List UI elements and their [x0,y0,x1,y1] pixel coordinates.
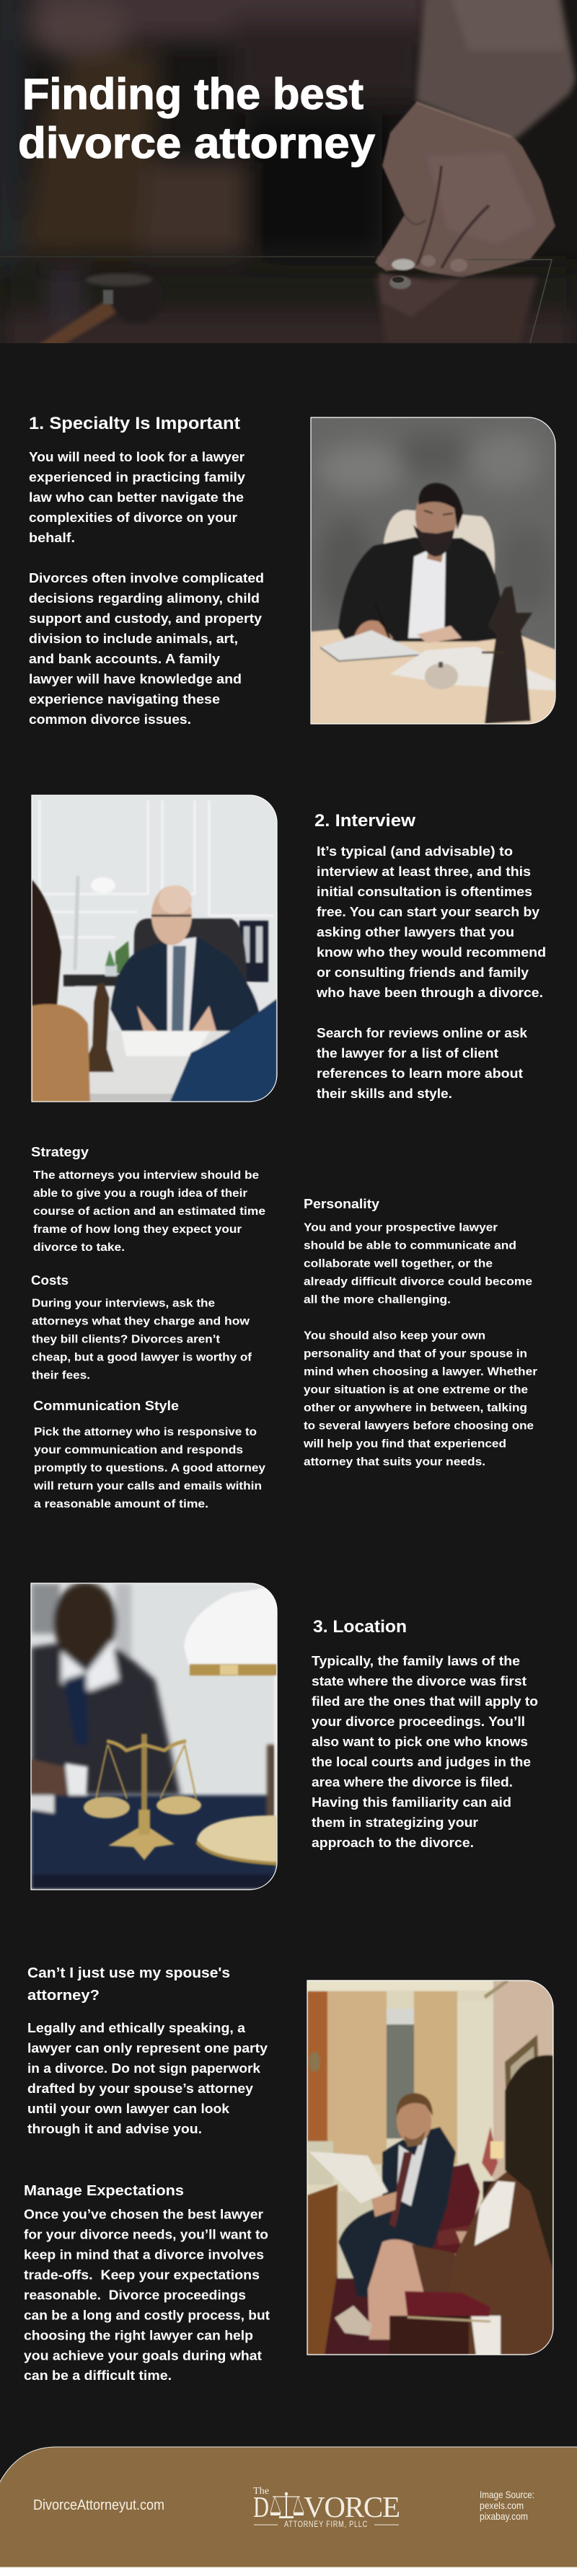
text block: interview: interview at least three, and this [317,864,531,879]
subsection: costs: Costs [31,1273,69,1288]
text block: location: them in strategizing your [312,1815,478,1830]
text block: interview: the lawyer for a list of client [317,1046,498,1061]
text block: specialty: behalf. [29,531,75,545]
sleeve [416,0,576,141]
text block: specialty: and bank accounts. A family [29,652,220,666]
subsection: manage expectations: trade-offs. Keep your expectations [24,2268,260,2283]
subsection: spouse's attorney: through it and advise you. [27,2122,202,2136]
hand [375,102,555,278]
subsection: spouse's attorney: drafted by your spouse’s attorney [27,2081,253,2096]
text block: location: Having this familiarity can aid [312,1795,511,1810]
subsection: costs [31,1273,252,1381]
subsection: strategy: The attorneys you interview should be [33,1169,259,1182]
text block: location: the local courts and judges in the [312,1755,531,1769]
text block: specialty: support and custody, and property [29,611,262,626]
photo: lawyer writing at desk [311,417,555,728]
subsection: communication style: promptly to questions. A good attorney [34,1462,265,1474]
text block: specialty: decisions regarding alimony, child [29,591,260,606]
text block: location: state where the divorce was first [312,1674,527,1688]
subsection: spouse's attorney [27,1965,268,2136]
text block: location: also want to pick one who knows [312,1735,528,1749]
subsection: personality: other or anywhere in between, talking [304,1402,527,1415]
text block: location: approach to the divorce. [312,1836,474,1850]
subsection: personality: attorney that suits your needs. [304,1456,485,1468]
subsection: manage expectations: for your divorce needs, you’ll want to [24,2228,268,2242]
subsection: costs: their fees. [32,1370,90,1381]
subsection: personality: all the more challenging. [304,1293,451,1306]
subsection: personality: mind when choosing a lawyer. Whether [304,1366,537,1378]
subsection: costs: During your interviews, ask the [32,1298,215,1309]
subsection: communication style: your communication and responds [34,1444,243,1456]
logo: The Divorce Attorney Firm, PLLC [253,2486,400,2529]
subsection: personality: your situation is at one extreme or the [304,1384,528,1396]
subsection: spouse's attorney: Can’t I just use my spouse's [27,1965,230,1981]
subsection: spouse's attorney: Legally and ethically speaking, a [27,2021,246,2035]
heading: 3. Location: 3. Location [313,1617,407,1637]
image source credits: pixabay.com [480,2510,528,2522]
table and reflections [0,257,552,346]
footer website: DivorceAttorneyut.com [33,2497,164,2513]
text block: interview: It’s typical (and advisable) to [317,844,513,859]
subsection: communication style: Pick the attorney who is responsive to [34,1426,257,1438]
text block: specialty: Divorces often involve complicated [29,571,264,585]
subsection: spouse's attorney: lawyer can only represent one party [27,2041,268,2055]
subsection: personality [303,1197,537,1468]
subsection: manage expectations: choosing the right lawyer can help [24,2329,253,2343]
text block: location [312,1654,538,1850]
subsection: strategy: Strategy [31,1145,89,1159]
text block: specialty [29,450,264,727]
photo: scales of justice on desk [31,1582,277,1890]
subsection: personality: will help you find that experienced [303,1438,506,1451]
subsection: personality: to several lawyers before choosing one [304,1420,534,1432]
subsection: strategy [31,1145,265,1254]
text block: specialty: common divorce issues. [29,712,191,727]
subsection: manage expectations: can be a difficult time. [24,2368,172,2383]
photo: attorney with client in wood office [307,1980,553,2355]
subsection: strategy: divorce to take. [33,1241,125,1254]
text block: specialty: experienced in practicing family [29,470,245,484]
text block: interview: initial consultation is oftentimes [317,885,532,899]
subsection: spouse's attorney: in a divorce. Do not sign paperwork [27,2061,261,2076]
title: divorce attorney [18,119,376,167]
subsection: personality: You and your prospective lawyer [304,1221,498,1234]
text block: interview: or consulting friends and family [317,965,529,980]
heading: 2. Interview: 2. Interview [314,811,415,831]
subsection: costs: attorneys what they charge and how [32,1315,250,1328]
subsection: manage expectations [24,2183,270,2383]
text block: interview: who have been through a divorce. [316,986,543,1000]
text block: interview: free. You can start your search by [317,905,539,919]
subsection: personality: You should also keep your own [304,1329,485,1342]
subsection: personality: collaborate well together, or the [304,1257,493,1270]
subsection: manage expectations: you achieve your goals during what [24,2349,262,2363]
text block: specialty: lawyer will have knowledge and [29,672,242,686]
text block: interview: asking other lawyers that you [317,925,514,939]
subsection: personality: should be able to communicate and [304,1240,516,1252]
text block: location: filed are the ones that will apply to [312,1694,538,1709]
subsection: personality: already difficult divorce could become [304,1276,532,1288]
subsection: communication style: Communication Style [33,1399,179,1413]
subsection: personality: Personality [304,1197,379,1211]
text block: interview: references to learn more about [317,1066,523,1081]
subsection: manage expectations: Manage Expectations [24,2183,184,2199]
image source credits [480,2489,534,2522]
subsection: spouse's attorney: attorney? [27,1988,100,2004]
subsection: costs: they bill clients? Divorces aren’t [32,1334,221,1345]
text block: location: Typically, the family laws of the [312,1654,520,1668]
hero photo: hand placing wedding ring on glass table [0,0,577,360]
title: Finding the best [22,70,364,118]
logo: The Divorce Attorney Firm, PLLC: The [253,2486,269,2497]
footer [0,2447,577,2567]
text block: specialty: law who can better navigate the [29,490,244,505]
subsection: manage expectations: Once you’ve chosen the best lawyer [24,2208,263,2222]
title [18,70,376,167]
logo: The Divorce Attorney Firm, PLLC: D [253,2490,269,2523]
text block: interview: their skills and style. [317,1086,452,1101]
heading: 1. Specialty Is Important: 1. Specialty Is Important [29,414,240,433]
text block: location: your divorce proceedings. You’ll [312,1714,525,1729]
text block: specialty: division to include animals, art, [29,632,238,646]
subsection: costs: cheap, but a good lawyer is worthy of [32,1351,252,1364]
subsection: personality: personality and that of your spouse in [304,1348,527,1360]
logo: The Divorce Attorney Firm, PLLC: VORCE [304,2490,400,2523]
text block: specialty: complexities of divorce on your [29,510,237,525]
subsection: strategy: frame of how long they expect your [33,1223,242,1236]
text block: interview [316,844,546,1101]
text block: specialty: experience navigating these [29,692,220,707]
image source credits: Image Source: [480,2489,534,2500]
text block: location: area where the divorce is filed. [312,1775,513,1789]
subsection: communication style [33,1399,265,1510]
subsection: manage expectations: keep in mind that a divorce involves [24,2248,264,2262]
text block: interview: know who they would recommend [317,945,546,960]
icon: scales of justice [270,2492,304,2518]
logo: The Divorce Attorney Firm, PLLC: ATTORNEY FIRM, PLLC [284,2519,368,2529]
image source credits: pexels.com [480,2500,524,2511]
subsection: strategy: course of action and an estimated time [33,1205,265,1218]
subsection: spouse's attorney: until your own lawyer can look [27,2102,230,2116]
subsection: communication style: will return your calls and emails within [33,1480,262,1492]
photo: bald lawyer meeting clients [32,795,277,1103]
subsection: strategy: able to give you a rough idea of their [33,1187,247,1200]
subsection: communication style: a reasonable amount of time. [34,1498,208,1510]
subsection: manage expectations: reasonable. Divorce proceedings [24,2288,246,2303]
footer band [0,2447,577,2567]
subsection: manage expectations: can be a long and costly process, but [24,2309,270,2323]
text block: specialty: You will need to look for a lawyer [29,450,245,464]
text block: interview: Search for reviews online or ask [317,1026,528,1040]
